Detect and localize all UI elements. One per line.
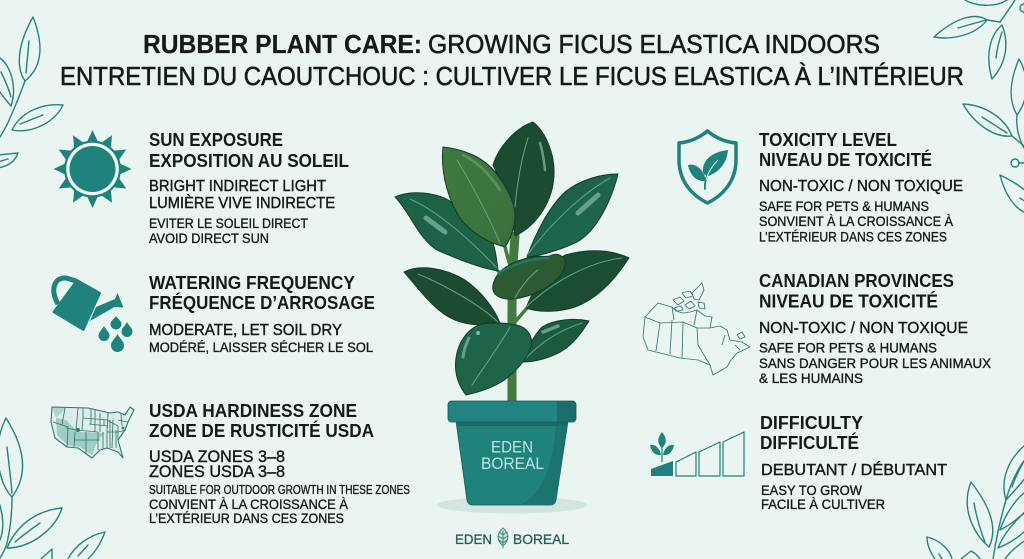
text: sun exposure xyxy=(149,130,349,246)
text: watering frequency: MODERATE, LET SOIL DRY xyxy=(149,322,342,339)
text: sun exposure: SUN EXPOSURE xyxy=(149,130,283,150)
pot label: EDEN xyxy=(491,438,533,457)
plant stems xyxy=(498,236,527,402)
text: difficulty xyxy=(760,413,948,512)
pot label: BOREAL xyxy=(481,454,544,473)
footer logo xyxy=(455,528,569,548)
pot shadow xyxy=(437,496,587,514)
text: difficulty: DIFFICULTÉ xyxy=(760,432,859,453)
decoration: bottom-left foliage xyxy=(0,418,105,559)
icon: watering can xyxy=(54,278,132,352)
leaf: olive front xyxy=(442,147,515,247)
leaf: small centre xyxy=(493,254,565,299)
text: toxicity level: SONVIENT À LA CROISSANCE À xyxy=(759,214,953,229)
footer logo: EDEN xyxy=(455,531,492,547)
leaf: bottom large xyxy=(455,323,532,395)
leaf: upper left xyxy=(395,193,498,271)
icon: Canada map xyxy=(643,283,750,375)
text: USDA hardiness zone xyxy=(149,401,410,526)
pot xyxy=(448,401,576,505)
footer logo: BOREAL xyxy=(513,531,569,547)
illustration: potted rubber plant xyxy=(395,122,629,514)
leaf: upper right xyxy=(527,174,618,257)
text: canadian provinces: NIVEAU DE TOXICITÉ xyxy=(759,290,938,312)
leaf: small right xyxy=(521,319,589,362)
text: toxicity level: TOXICITY LEVEL xyxy=(759,130,897,150)
icon: USA map xyxy=(51,407,134,458)
text: canadian provinces: CANADIAN PROVINCES xyxy=(759,271,954,291)
decoration: bottom-right foliage xyxy=(927,446,1024,559)
text: watering frequency: MODÉRÉ, LAISSER SÉCHER LE SOL xyxy=(149,340,373,355)
icon: difficulty steps with sprout xyxy=(650,432,744,476)
title: GROWING FICUS ELASTICA INDOORS xyxy=(428,31,880,59)
text: USDA hardiness zone: USDA HARDINESS ZONE xyxy=(149,401,357,421)
panel: USDA hardiness zone xyxy=(51,401,410,526)
text: canadian provinces xyxy=(759,271,991,386)
panel: difficulty xyxy=(650,413,948,512)
text: sun exposure: AVOID DIRECT SUN xyxy=(149,231,269,246)
text: difficulty: EASY TO GROW xyxy=(761,483,862,498)
panel: sun exposure xyxy=(54,130,349,246)
pot label xyxy=(481,438,544,473)
leaf: top dark xyxy=(493,122,554,236)
text: sun exposure: LUMIÈRE VIVE INDIRECTE xyxy=(149,195,335,212)
text: canadian provinces: NON-TOXIC / NON TOXIQUE xyxy=(759,320,968,337)
text: watering frequency: WATERING FREQUENCY xyxy=(149,273,355,293)
icon detail: arctic islands xyxy=(673,283,745,339)
text: difficulty: DEBUTANT / DÉBUTANT xyxy=(761,462,948,479)
text: difficulty: FACILE À CULTIVER xyxy=(761,497,885,512)
leaf: right middle xyxy=(526,251,629,311)
decoration: top-left foliage xyxy=(0,17,63,168)
text: canadian provinces: SANS DANGER POUR LES ANIMAUX xyxy=(759,356,991,371)
text: sun exposure: BRIGHT INDIRECT LIGHT xyxy=(149,178,327,195)
text: toxicity level: NIVEAU DE TOXICITÉ xyxy=(759,149,932,170)
text: canadian provinces: & LES HUMAINS xyxy=(759,371,863,386)
text: USDA hardiness zone: CONVIENT À LA CROISSANCE À xyxy=(149,497,348,512)
panel: watering frequency xyxy=(54,273,375,355)
text: USDA hardiness zone: USDA ZONES 3–8 xyxy=(149,447,285,466)
icon: shield with sprout xyxy=(679,131,736,203)
text: toxicity level: SAFE FOR PETS & HUMANS xyxy=(759,199,929,214)
text: watering frequency: FRÉQUENCE D’ARROSAGE xyxy=(149,292,375,313)
text: USDA hardiness zone: ZONE DE RUSTICITÉ USDA xyxy=(149,420,374,441)
icon: sun xyxy=(54,130,132,208)
text: USDA hardiness zone: L’EXTÉRIEUR DANS CES ZONES xyxy=(149,511,344,526)
text: sun exposure: EXPOSITION AU SOLEIL xyxy=(149,151,349,171)
title: ENTRETIEN DU CAOUTCHOUC : CULTIVER LE FICUS ELASTICA À L’INTÉRIEUR xyxy=(60,62,964,91)
text: USDA hardiness zone: ZONES USDA 3–8 xyxy=(149,462,285,481)
text: USDA hardiness zone: SUITABLE FOR OUTDOOR GROWTH IN THESE ZONES xyxy=(149,483,410,497)
panel: canadian provinces xyxy=(643,271,991,386)
decoration: top-right foliage xyxy=(934,0,1024,215)
text: sun exposure: EVITER LE SOLEIL DIRECT xyxy=(149,216,308,231)
text: toxicity level: L’EXTÉRIEUR DANS CES ZONES xyxy=(759,230,947,244)
panel: toxicity level xyxy=(679,130,963,244)
text: canadian provinces: SAFE FOR PETS & HUMANS xyxy=(759,340,937,356)
text: toxicity level xyxy=(759,130,963,244)
icon: logo leaf xyxy=(498,528,508,548)
text: toxicity level: NON-TOXIC / NON TOXIQUE xyxy=(759,178,963,195)
title xyxy=(60,31,964,91)
text: difficulty: DIFFICULTY xyxy=(760,413,863,433)
leaf: left lower xyxy=(404,268,500,325)
title: RUBBER PLANT CARE: xyxy=(143,31,422,59)
text: watering frequency xyxy=(149,273,375,355)
